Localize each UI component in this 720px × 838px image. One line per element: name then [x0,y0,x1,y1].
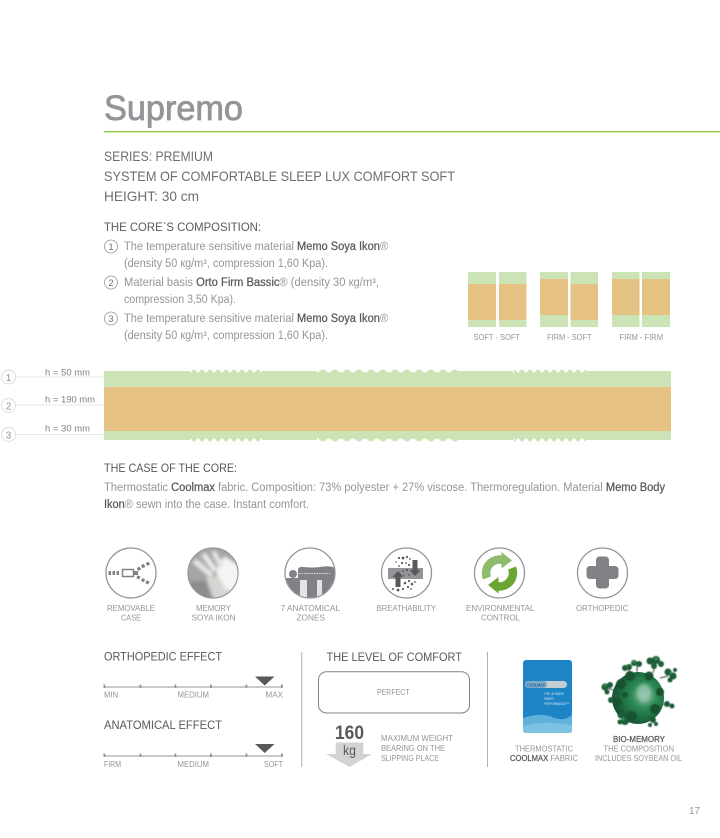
item 2: 2 [108,278,114,288]
page number: 17 [689,806,700,817]
mattress layers [104,368,671,442]
item 1: (density 50 кg/m³, compression 1,60 Kpa). [124,258,328,270]
orthopedic effect scale: MIN [104,690,118,700]
firm-soft diagram: FIRM - SOFT [547,333,592,342]
icon: memory foam hand [188,548,240,600]
weight value: 160 [335,723,364,744]
column dividers [301,652,488,767]
title: Supremo [104,89,243,128]
series information: SYSTEM OF COMFORTABLE SLEEP LUX COMFORT SOFT [104,168,455,184]
weight description: SLIPPING PLACE [381,754,439,763]
item 2: compression 3,50 Kpa). [124,294,236,306]
case description: Thermostatic Coolmax fabric. Composition: 73% polyester + 27% viscose. Thermoregulation. Material Memo Body [104,482,665,494]
feature labels: ORTHOPEDIC [576,604,629,613]
feature labels [107,604,629,622]
anatomical effect scale: ANATOMICAL EFFECT [104,718,223,732]
feature labels: CASE [121,614,141,622]
feature labels: 7 ANATOMICAL [280,604,341,613]
coolmax caption [510,744,578,763]
firmness diagrams [468,272,670,342]
feature labels: SOYA IKON [192,614,236,622]
coolmax fabric [510,660,578,763]
bio-memory caption: INCLUDES SOYBEAN OIL [595,754,682,763]
series information [104,148,455,204]
layer heights: h = 30 mm [45,424,90,434]
feature labels: MEMORY [196,604,232,613]
coolmax swatch [523,660,572,733]
feature labels: CONTROL [481,614,521,622]
soft-soft diagram: SOFT - SOFT [474,333,520,342]
coolmax caption: COOLMAX FABRIC [510,754,578,763]
icon: removable case [106,548,156,598]
icon: environmental control [474,548,524,598]
anatomical effect scale: SOFT [264,760,283,769]
orthopedic effect scale: MAX [266,690,284,700]
core composition heading: THE CORE`S COMPOSITION: [104,220,261,234]
orthopedic effect scale: ORTHOPEDIC EFFECT [104,650,223,664]
layer number 1 [2,370,16,384]
soft-soft diagram [468,272,526,342]
case heading: THE CASE OF THE CORE: [104,461,237,475]
series information: SERIES: PREMIUM [104,148,213,164]
case description: Ikon® sewn into the case. Instant comfort. [104,499,309,511]
weight description: MAXIMUM WEIGHT [381,734,453,743]
firm-firm diagram [612,272,670,342]
layer heights [45,368,95,434]
layer number 2 [2,398,16,412]
item 2 [104,276,379,306]
icon: breathability [382,548,432,598]
item 3: The temperature sensitive material Memo Soya Ikon® [124,313,388,325]
case description [104,482,665,511]
item 2: Material basis Orto Firm Bassic® (density 30 кg/m³, [124,277,379,289]
icon: green planet with trees [602,656,677,727]
anatomical effect scale: MEDIUM [178,760,209,769]
weight description [381,734,453,763]
feature icons [106,548,629,622]
layer heights: h = 50 mm [45,368,90,378]
icon: anatomical zones [285,548,335,600]
feature labels: BREATHABILITY [376,604,437,613]
level of comfort: PERFECT [377,688,410,697]
coolmax swatch: THE ULTIMATE [544,692,565,696]
bio-memory caption: THE COMPOSITION [604,744,674,754]
item 1: 1 [108,242,114,252]
level of comfort [318,650,470,713]
feature labels: ENVIRONMENTAL [466,604,535,613]
layer leader lines [16,377,104,434]
item 1: The temperature sensitive material Memo Soya Ikon® [124,241,388,253]
bio-memory caption [595,735,682,763]
series information: HEIGHT: 30 cm [104,188,199,204]
anatomical effect scale [104,718,283,769]
bio-memory [595,656,682,763]
title rule [104,131,720,132]
coolmax caption: THERMOSTATIC [515,744,573,754]
layer heights: h = 190 mm [45,394,95,406]
firm-firm diagram: FIRM - FIRM [620,333,663,342]
weight arrow [326,742,372,767]
orthopedic effect scale: MEDIUM [178,690,209,700]
item 3: (density 50 кg/m³, compression 1,60 Kpa). [124,330,328,342]
icon: orthopedic cross [578,548,628,598]
anatomical effect scale: FIRM [104,760,121,769]
coolmax swatch: COOLMAX [527,682,545,688]
bio-memory caption: BIO-MEMORY [613,735,666,744]
mattress cross-section [2,368,671,442]
layer number 2: 2 [6,402,12,412]
coolmax swatch: FABRIC [544,697,554,701]
item 3: 3 [108,314,114,324]
layer number 3 [2,428,16,442]
layer number 3: 3 [6,430,12,442]
orthopedic effect scale [104,650,284,700]
firm-soft diagram [540,272,598,342]
coolmax swatch: PERFORMANCE™ [544,702,569,706]
core composition [104,220,388,342]
item 1 [104,240,388,270]
feature labels: REMOVABLE [107,604,155,613]
feature labels: ZONES [296,614,325,622]
level of comfort: THE LEVEL OF COMFORT [326,650,463,664]
item 3 [104,312,388,342]
case of the core [104,461,665,511]
maximum weight [326,723,453,767]
weight unit: kg [343,742,356,758]
layer number 1: 1 [6,373,12,384]
weight description: BEARING ON THE [381,744,445,753]
